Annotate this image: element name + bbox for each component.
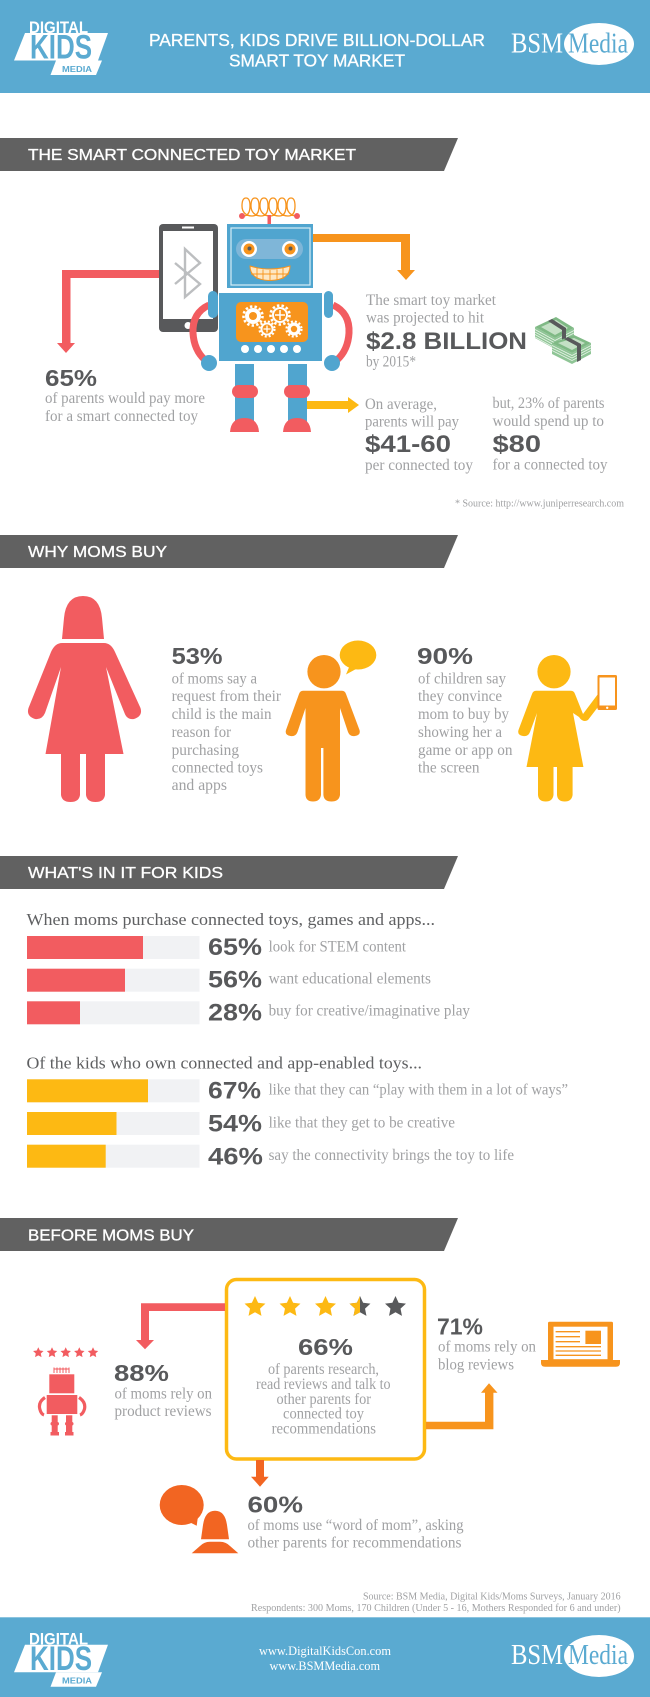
footer websites xyxy=(259,1643,391,1673)
footer logo: Digital Kids Media xyxy=(14,1630,108,1687)
arrow: box to word of mom xyxy=(251,1460,269,1487)
bar: 54 percent creative: like that they get to be creative xyxy=(269,1114,455,1131)
stat: 71 percent: of moms rely on xyxy=(438,1339,536,1356)
body xyxy=(219,293,322,361)
stat: 88 percent: 88% xyxy=(114,1360,169,1386)
arrow: box to product reviews xyxy=(136,1303,225,1349)
stat: 2.8 billion: $2.8 BILLION xyxy=(366,328,527,355)
title xyxy=(149,30,485,71)
icon: mom figure xyxy=(28,596,141,802)
stat: 65 percent xyxy=(45,365,205,425)
stat: 60 percent: other parents for recommendations xyxy=(248,1534,462,1551)
stat: 90 percent: game or app on xyxy=(418,742,512,759)
bar: 65 percent STEM: 65% xyxy=(208,934,262,961)
stat: up to 80 dollars: $80 xyxy=(492,431,541,458)
bar chart: kids likes xyxy=(27,1077,568,1170)
icon: small robot with five stars xyxy=(33,1347,98,1436)
title: SMART TOY MARKET xyxy=(229,51,405,71)
bar: 46 percent connectivity xyxy=(27,1143,514,1170)
icon: boy with speech bubble xyxy=(286,640,376,802)
stat: 90 percent: of children say xyxy=(418,670,506,687)
footer websites: www.DigitalKidsCon.com xyxy=(259,1643,391,1658)
logo: BSM Media: BSM xyxy=(511,28,563,60)
logo: Digital Kids Media xyxy=(14,18,108,75)
stat: 53 percent: child is the main xyxy=(172,706,272,723)
header band xyxy=(0,0,650,93)
stat: 90 percent: the screen xyxy=(418,760,480,777)
icon: robot xyxy=(193,198,349,432)
legs xyxy=(230,364,311,432)
bar: 28 percent creative: buy for creative/imaginative play xyxy=(269,1003,470,1020)
stat: 66 percent: other parents for xyxy=(276,1391,372,1408)
stat: 60 percent: of moms use “word of mom”, asking xyxy=(248,1517,464,1534)
stat: 65 percent: 65% xyxy=(45,365,97,391)
chart heading: moms purchase: When moms purchase connected toys, games and apps... xyxy=(26,910,435,929)
heading: the smart connected toy market: THE SMART CONNECTED TOY MARKET xyxy=(28,147,356,164)
stat: 66 percent xyxy=(256,1334,391,1438)
stat: 90 percent: showing her a xyxy=(418,724,502,741)
stat: 53 percent: connected toys xyxy=(172,760,263,777)
source note: surveys: Respondents: 300 Moms, 170 Children (Under 5 - 16, Mothers Responded for 6 and under) xyxy=(251,1603,621,1614)
rating stars xyxy=(245,1296,406,1316)
bar: 56 percent educational xyxy=(27,967,431,994)
stat: 71 percent: 71% xyxy=(437,1313,483,1339)
bar: 54 percent creative: 54% xyxy=(208,1111,262,1138)
stat: 66 percent: 66% xyxy=(298,1334,353,1360)
stat: 65 percent: for a smart connected toy xyxy=(45,408,198,425)
heading: what's in it for kids: WHAT'S IN IT FOR KIDS xyxy=(28,865,223,882)
stat: 2.8 billion xyxy=(366,292,527,371)
stat: 88 percent: of moms rely on xyxy=(114,1385,212,1402)
footer logo: BSM Media: Media xyxy=(568,1639,628,1671)
bar: 56 percent educational: 56% xyxy=(208,967,262,994)
heading: why moms buy: WHY MOMS BUY xyxy=(28,544,167,561)
stat: up to 80 dollars: would spend up to xyxy=(492,413,604,430)
bar: 65 percent STEM: look for STEM content xyxy=(269,939,407,956)
icon: smartphone with bluetooth xyxy=(159,224,218,332)
heading: the smart connected toy market xyxy=(0,138,458,171)
shoulders and hands xyxy=(201,291,340,371)
heading: before moms buy: BEFORE MOMS BUY xyxy=(28,1228,194,1245)
bar: 67 percent play xyxy=(27,1077,568,1104)
stat: up to 80 dollars: for a connected toy xyxy=(492,456,608,473)
panel: 66 percent callout box xyxy=(226,1280,424,1459)
title: PARENTS, KIDS DRIVE BILLION-DOLLAR xyxy=(149,30,485,50)
stat: 90 percent: they convince xyxy=(418,688,502,705)
footer logo: Digital Kids Media: KIDS xyxy=(30,1640,92,1678)
logo: BSM Media: Media xyxy=(568,28,628,60)
stat: 53 percent: reason for xyxy=(172,724,232,741)
bar: 54 percent creative xyxy=(27,1111,455,1138)
icon: mom with speech bubble xyxy=(160,1485,238,1553)
bar: 28 percent creative: 28% xyxy=(208,999,262,1026)
stat: up to 80 dollars xyxy=(492,395,608,473)
stat: 90 percent: mom to buy by xyxy=(418,706,509,723)
chart heading: kids who own: Of the kids who own connected and app-enabled toys... xyxy=(26,1053,422,1072)
footer websites: www.BSMMedia.com xyxy=(270,1658,380,1673)
head xyxy=(227,224,313,288)
stat: 60 percent: 60% xyxy=(248,1491,303,1517)
antenna spring xyxy=(239,198,300,224)
stat: 2.8 billion: by 2015* xyxy=(366,354,416,371)
stat: 71 percent xyxy=(437,1313,536,1373)
stat: 65 percent: of parents would pay more xyxy=(45,390,205,407)
stat: 66 percent: connected toy xyxy=(283,1406,364,1423)
bar: 56 percent educational: want educational elements xyxy=(269,970,431,987)
five stars xyxy=(33,1347,98,1357)
icon: girl with phone xyxy=(518,655,617,802)
stat: 53 percent: purchasing xyxy=(172,742,239,759)
stat: 88 percent: product reviews xyxy=(114,1403,212,1420)
heading: why moms buy xyxy=(0,535,458,568)
stat: 2.8 billion: was projected to hit xyxy=(366,310,485,327)
arrow: phone to 65 percent xyxy=(57,270,159,353)
stat: average spend: $41-60 xyxy=(365,431,451,458)
stat: 53 percent: of moms say a xyxy=(172,670,257,687)
icon: money stacks xyxy=(535,317,591,364)
stat: 66 percent: recommendations xyxy=(272,1421,376,1438)
arrow: box to blog reviews xyxy=(426,1383,498,1429)
heading: before moms buy xyxy=(0,1218,458,1251)
stat: average spend: On average, xyxy=(365,396,437,413)
stat: 53 percent: request from their xyxy=(172,688,282,705)
logo: BSM Media xyxy=(511,23,634,65)
heading: what's in it for kids xyxy=(0,856,458,889)
stat: up to 80 dollars: but, 23% of parents xyxy=(492,395,604,412)
stat: 66 percent: read reviews and talk to xyxy=(256,1376,391,1393)
bar: 28 percent creative xyxy=(27,999,470,1026)
stat: 53 percent: 53% xyxy=(172,643,223,669)
bar: 65 percent STEM xyxy=(27,934,407,961)
stat: 90 percent xyxy=(417,643,512,777)
logo: Digital Kids Media: DIGITAL xyxy=(29,18,88,37)
stat: 66 percent: of parents research, xyxy=(268,1361,379,1378)
source note: surveys xyxy=(251,1591,621,1614)
source note: juniper: * Source: http://www.juniperresearch.com xyxy=(455,499,624,510)
icon: laptop with blog xyxy=(541,1322,620,1367)
stat: 71 percent: blog reviews xyxy=(438,1356,514,1373)
bar: 67 percent play: like that they can “play with them in a lot of ways” xyxy=(269,1081,568,1098)
source note: surveys: Source: BSM Media, Digital Kids/Moms Surveys, January 2016 xyxy=(363,1591,621,1602)
logo: Digital Kids Media: MEDIA xyxy=(62,64,92,74)
arrow: robot to market projection xyxy=(313,234,415,280)
footer band xyxy=(0,1617,650,1697)
stat: 88 percent xyxy=(114,1360,212,1420)
stat: average spend: parents will pay xyxy=(365,414,459,431)
stat: 53 percent xyxy=(172,643,282,794)
footer logo: Digital Kids Media: MEDIA xyxy=(62,1676,92,1686)
stat: 60 percent xyxy=(248,1491,464,1551)
footer logo: BSM Media xyxy=(511,1635,634,1677)
stat: average spend xyxy=(365,396,473,474)
footer logo: BSM Media: BSM xyxy=(511,1639,563,1671)
stat: average spend: per connected toy xyxy=(365,457,473,474)
bar: 46 percent connectivity: 46% xyxy=(208,1143,263,1170)
logo: Digital Kids Media: KIDS xyxy=(30,28,92,66)
footer logo: Digital Kids Media: DIGITAL xyxy=(29,1630,88,1649)
stat: 90 percent: 90% xyxy=(417,643,473,669)
bar: 67 percent play: 67% xyxy=(208,1077,261,1104)
arrow: robot to spend xyxy=(307,397,359,413)
stat: 2.8 billion: The smart toy market xyxy=(366,292,497,309)
bar chart: moms purchase reasons xyxy=(27,934,470,1026)
arms xyxy=(193,305,349,360)
stat: 53 percent: and apps xyxy=(172,777,227,794)
bar: 46 percent connectivity: say the connectivity brings the toy to life xyxy=(269,1147,514,1164)
